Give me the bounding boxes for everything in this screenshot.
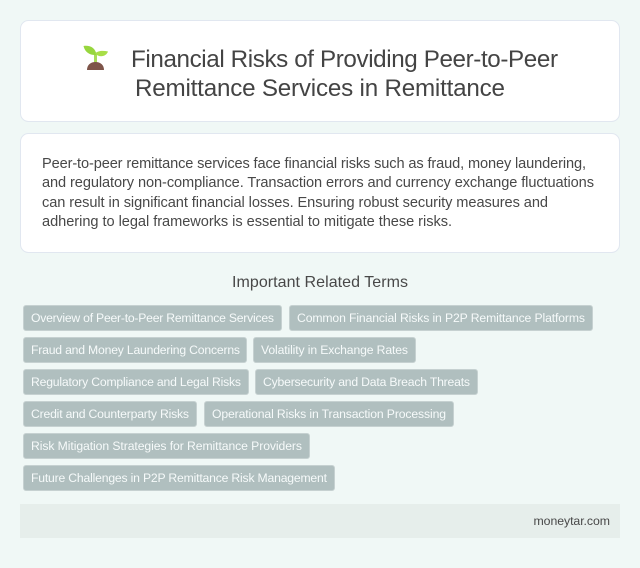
title: Remittance Services in Remittance — [135, 75, 505, 102]
tag: credit — [24, 402, 196, 426]
summary text: Peer-to-peer remittance services face financial risks such as fraud, money laundering, — [42, 156, 586, 172]
tag: credit: Credit and Counterparty Risks — [31, 407, 189, 421]
panel: header — [20, 20, 620, 122]
tag: operational: Operational Risks in Transaction Processing — [212, 407, 446, 421]
summary text — [42, 156, 594, 230]
tag: fraud — [24, 338, 246, 362]
tag: regulatory — [24, 370, 248, 394]
title — [131, 46, 558, 102]
tag: common risks — [290, 306, 592, 330]
title: Financial Risks of Providing Peer-to-Peer — [131, 46, 558, 73]
tag list — [24, 306, 592, 490]
tag: mitigation: Risk Mitigation Strategies for Remittance Providers — [31, 439, 302, 453]
footer source: moneytar.com — [534, 514, 610, 528]
footer — [20, 504, 620, 538]
tag: cybersecurity: Cybersecurity and Data Breach Threats — [263, 375, 470, 389]
summary text: adhering to legal frameworks is essential to mitigate these risks. — [42, 214, 452, 230]
tag: regulatory: Regulatory Compliance and Legal Risks — [31, 375, 241, 389]
tag: fraud: Fraud and Money Laundering Concerns — [31, 343, 240, 357]
tag: future — [24, 466, 334, 490]
panel: summary — [20, 134, 620, 252]
tag: cybersecurity — [256, 370, 478, 394]
tag: volatility — [254, 338, 416, 362]
tag: future: Future Challenges in P2P Remittance Risk Management — [31, 471, 328, 485]
icon: seedling — [84, 46, 108, 70]
summary text: can result in significant financial losses. Ensuring robust security measures and — [42, 195, 548, 211]
tag: overview — [24, 306, 282, 330]
tag: volatility: Volatility in Exchange Rates — [261, 343, 408, 357]
summary text: and regulatory non-compliance. Transaction errors and currency exchange fluctuations — [42, 175, 594, 191]
tag: overview: Overview of Peer-to-Peer Remittance Services — [31, 311, 274, 325]
tag: mitigation — [24, 434, 310, 458]
tag: common risks: Common Financial Risks in P2P Remittance Platforms — [297, 311, 585, 325]
tag: operational — [204, 402, 454, 426]
heading: related terms: Important Related Terms — [232, 274, 408, 291]
